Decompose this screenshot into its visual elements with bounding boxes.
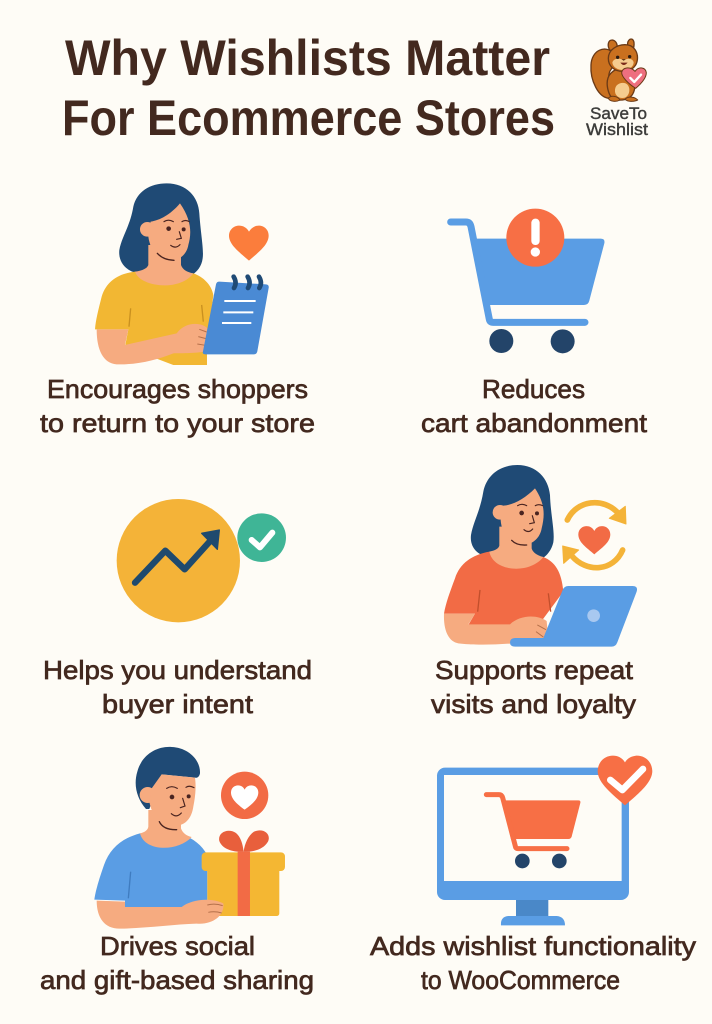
label: Helps you understand — [43, 655, 312, 685]
label: Reduces — [482, 374, 585, 404]
panel: reduces cart abandonment — [421, 209, 648, 438]
brand name: SaveTo — [590, 104, 647, 123]
label: Encourages shoppers — [47, 374, 308, 404]
title — [62, 30, 555, 146]
label — [40, 374, 315, 438]
label: and gift-based sharing — [40, 965, 314, 995]
label — [40, 931, 314, 995]
label — [421, 374, 648, 438]
label: Supports repeat — [435, 655, 634, 685]
brand name — [586, 104, 648, 139]
icon: man with gift box — [94, 747, 285, 929]
label — [431, 655, 636, 719]
label: buyer intent — [102, 689, 254, 719]
label: cart abandonment — [421, 408, 648, 438]
panel: understand buyer intent — [43, 499, 312, 719]
logo: SaveToWishlist squirrel — [586, 39, 648, 139]
panel: encourages shoppers to return — [40, 183, 315, 438]
label: Adds wishlist functionality — [370, 931, 696, 961]
panel: repeat visits and loyalty — [431, 465, 637, 719]
label: to WooCommerce — [421, 965, 620, 995]
label — [370, 931, 696, 995]
panel: adds wishlist functionality — [370, 756, 696, 995]
icon: growth chart with check — [117, 499, 286, 622]
title: Why Wishlists Matter — [65, 30, 550, 86]
title: For Ecommerce Stores — [62, 90, 555, 146]
label: to return to your store — [40, 408, 315, 438]
icon: woman with notebook and heart — [95, 183, 269, 365]
label — [43, 655, 312, 719]
icon: woman with laptop and loop arrows — [444, 465, 637, 647]
icon: monitor with cart and heart check — [437, 756, 652, 925]
brand name: Wishlist — [586, 120, 648, 139]
icon: squirrel mascot — [591, 39, 646, 101]
panel: social and gift sharing — [40, 747, 314, 995]
icon: shopping cart with alert — [451, 209, 604, 353]
label: Drives social — [100, 931, 255, 961]
label: visits and loyalty — [431, 689, 636, 719]
